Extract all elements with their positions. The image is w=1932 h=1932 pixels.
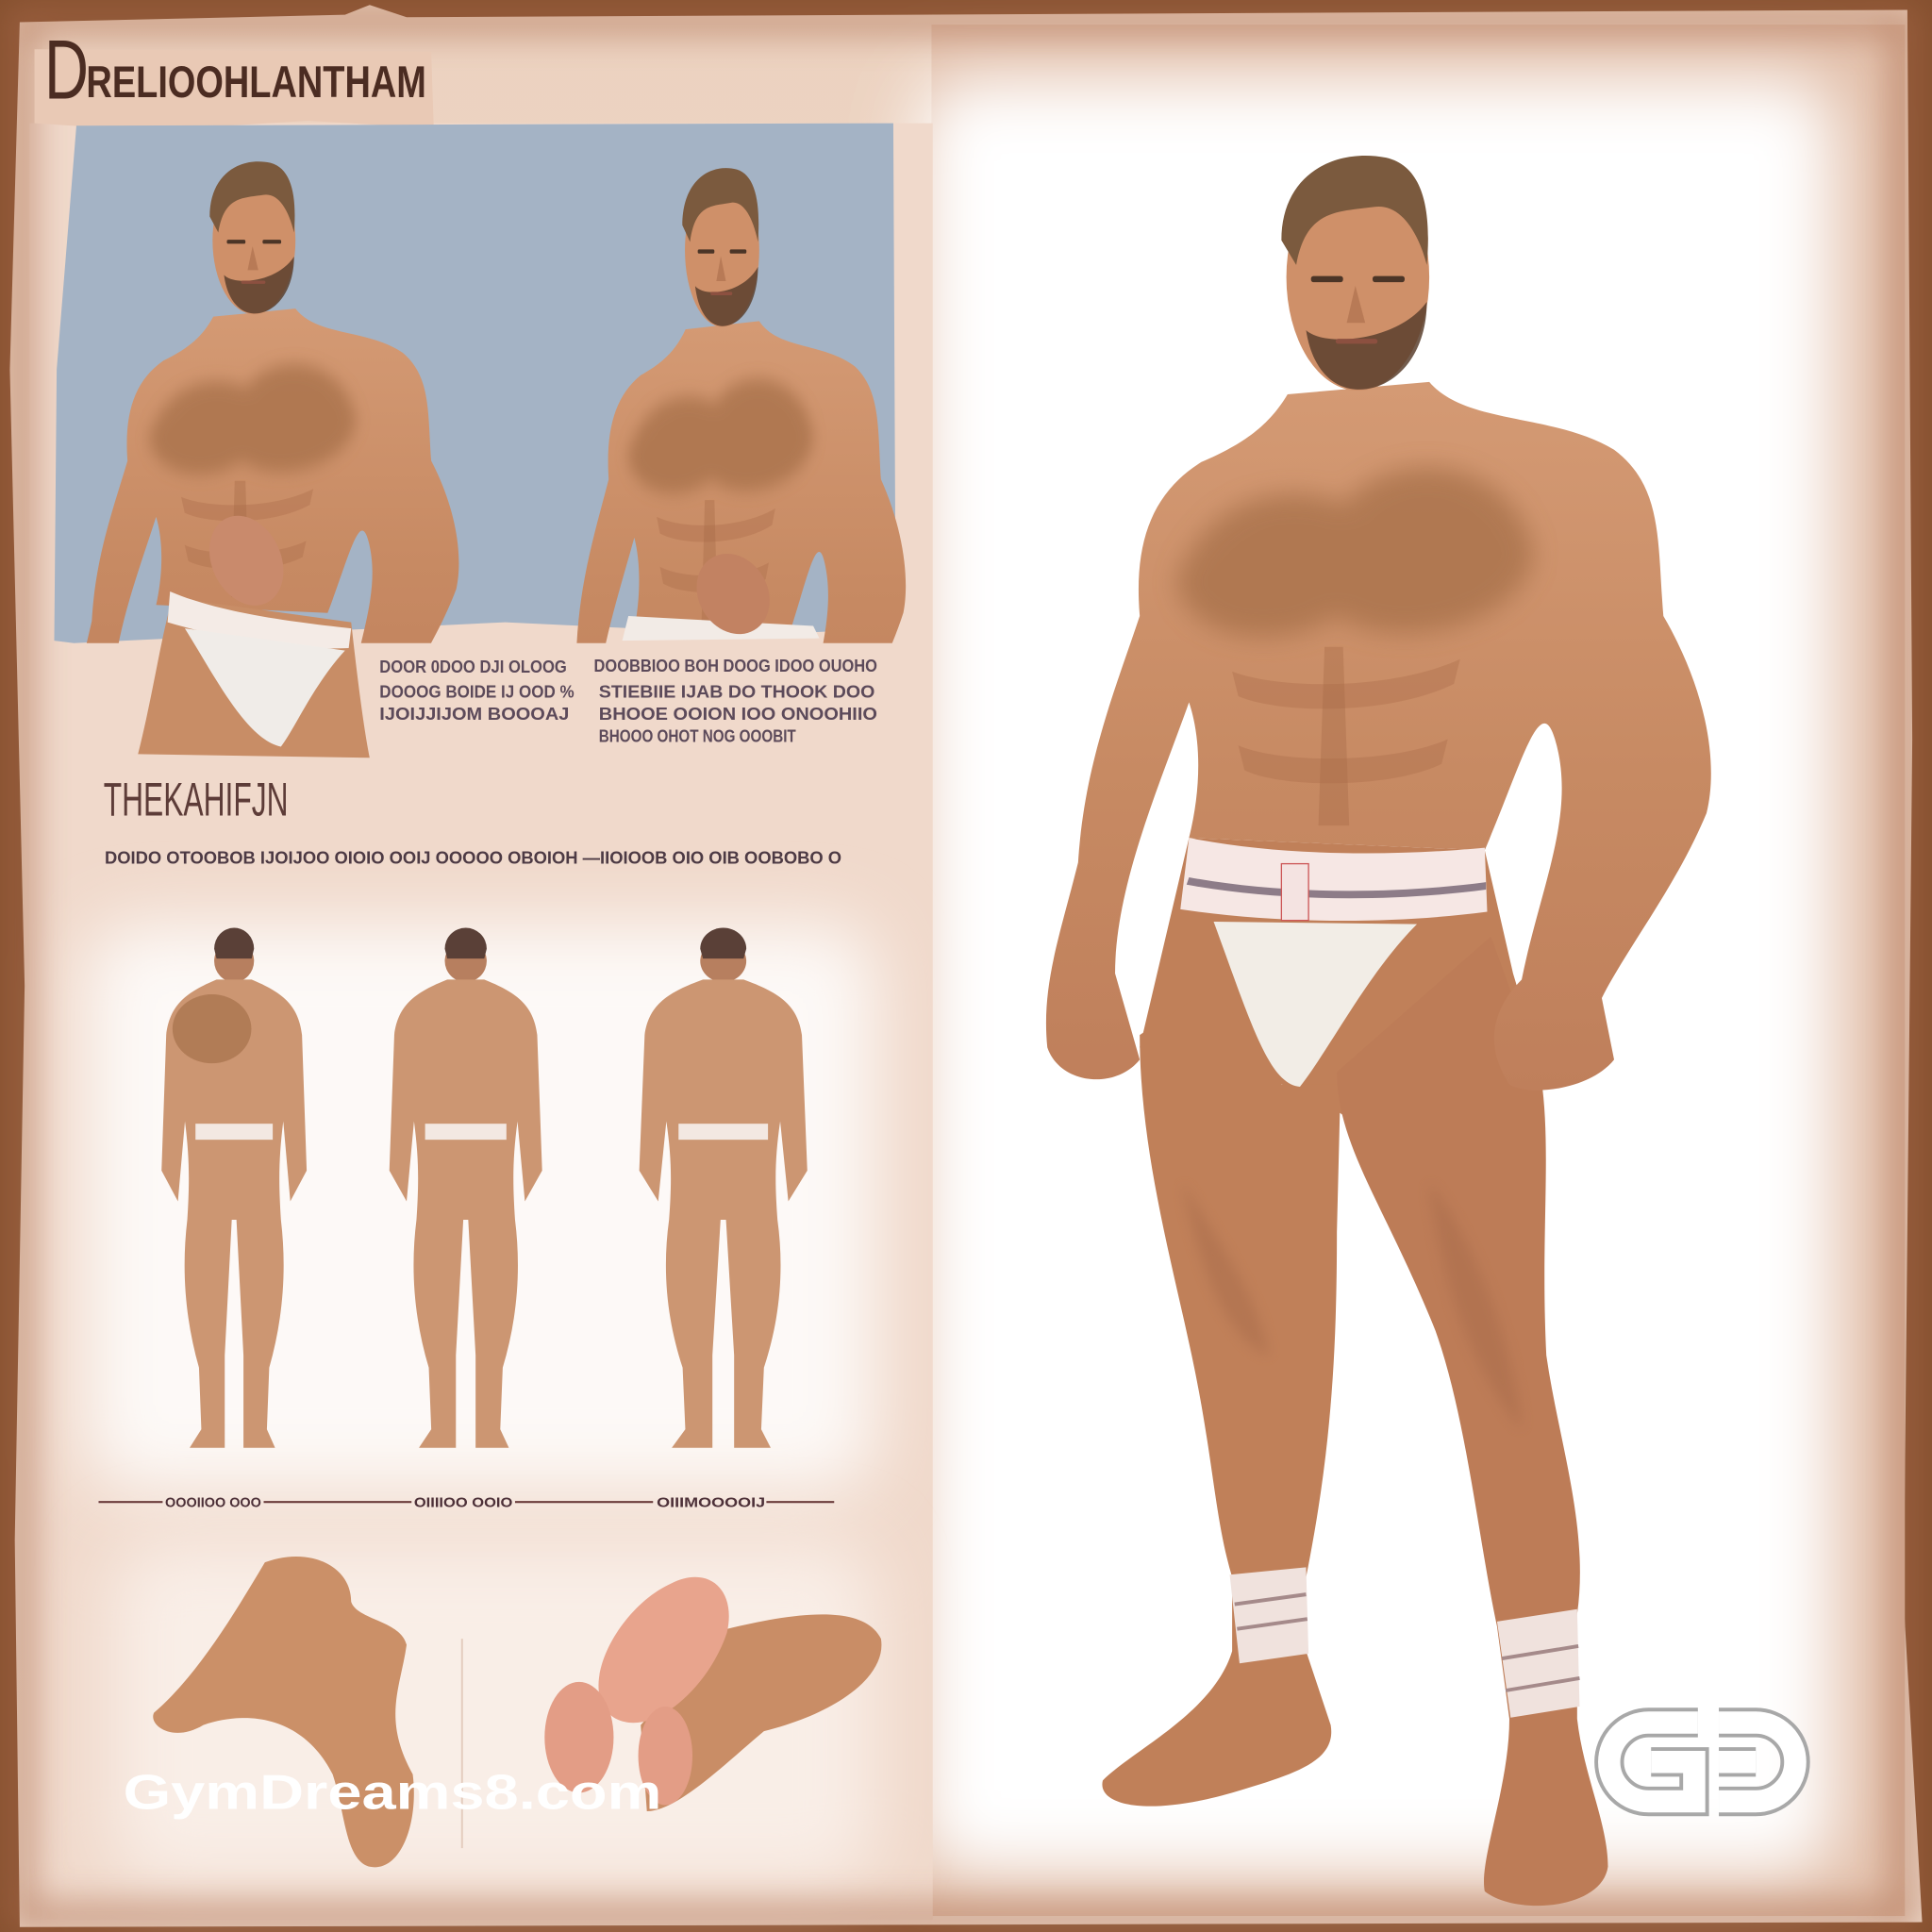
ankle wrap right xyxy=(1497,1609,1579,1718)
heading: section two: THEKAHIFJN xyxy=(104,774,289,826)
panel: blue backdrop xyxy=(54,124,896,643)
figure: full body main xyxy=(1046,156,1711,1906)
brief sliver xyxy=(623,616,820,641)
text block: top right notes: DOOBBIOO BOH DOOG IDOO OUOHO xyxy=(594,656,877,675)
text block: top middle notes: IJOIJJIJOM BOOOAJ xyxy=(379,704,569,724)
captions with rule: OOOIIOO OOO xyxy=(165,1495,261,1510)
captions with rule: OIIIMOOOOIJ xyxy=(657,1495,765,1510)
captions with rule xyxy=(98,1495,834,1510)
text block: top right notes: BHOOE OOION IOO ONOOHIIO xyxy=(599,704,877,724)
captions with rule: OIIIIOO OOIO xyxy=(414,1495,512,1510)
waistband stripe xyxy=(1187,877,1486,898)
front panel xyxy=(1214,922,1417,1087)
text block: top middle notes: DOOOG BOIDE IJ OOD % xyxy=(379,681,575,701)
figure: front view with blue background xyxy=(74,161,458,769)
side view chest xyxy=(173,994,251,1063)
foot study: left xyxy=(153,1557,414,1867)
title: RELIOOHLANTHAM xyxy=(86,57,426,107)
title xyxy=(44,23,426,116)
figure: second front view xyxy=(560,168,906,800)
panel: full figure white backdrop xyxy=(918,25,1905,1916)
legs and hips xyxy=(1102,838,1607,1906)
title strip xyxy=(35,49,434,130)
caption line: DOIDO OTOOBOB IJOIJOO OIOIO OOIJ OOOOO OBOIOH —IIOIOOB OIO OIB OOBOBO O xyxy=(105,848,841,868)
hand xyxy=(195,504,297,618)
text block: top right notes xyxy=(594,656,877,745)
waistband xyxy=(1180,838,1487,921)
title: D xyxy=(44,23,89,116)
ankle wrap left xyxy=(1230,1567,1308,1663)
text block: top middle notes xyxy=(379,657,575,724)
foot study divider xyxy=(461,1639,463,1848)
text block: top right notes: STIEBIIE IJAB DO THOOK DOO xyxy=(599,681,874,701)
waistband label xyxy=(1281,864,1308,921)
lower body with brief xyxy=(138,591,370,758)
foot study: right xyxy=(544,1577,881,1811)
text block: top right notes: BHOOO OHOT NOG OOOBIT xyxy=(599,725,796,745)
hand xyxy=(682,541,784,647)
figure: rear view xyxy=(640,928,808,1448)
figure: side view xyxy=(161,928,307,1448)
torso, arms and head xyxy=(1046,156,1711,1091)
logo: GD monogram xyxy=(1609,1723,1795,1802)
figure: rear three-quarter view xyxy=(390,928,542,1448)
text block: top middle notes: DOOR 0DOO DJI OLOOG xyxy=(379,657,567,676)
panel: left column paper xyxy=(29,124,933,1920)
watermark: site name: GymDreams8.com xyxy=(124,1765,661,1820)
